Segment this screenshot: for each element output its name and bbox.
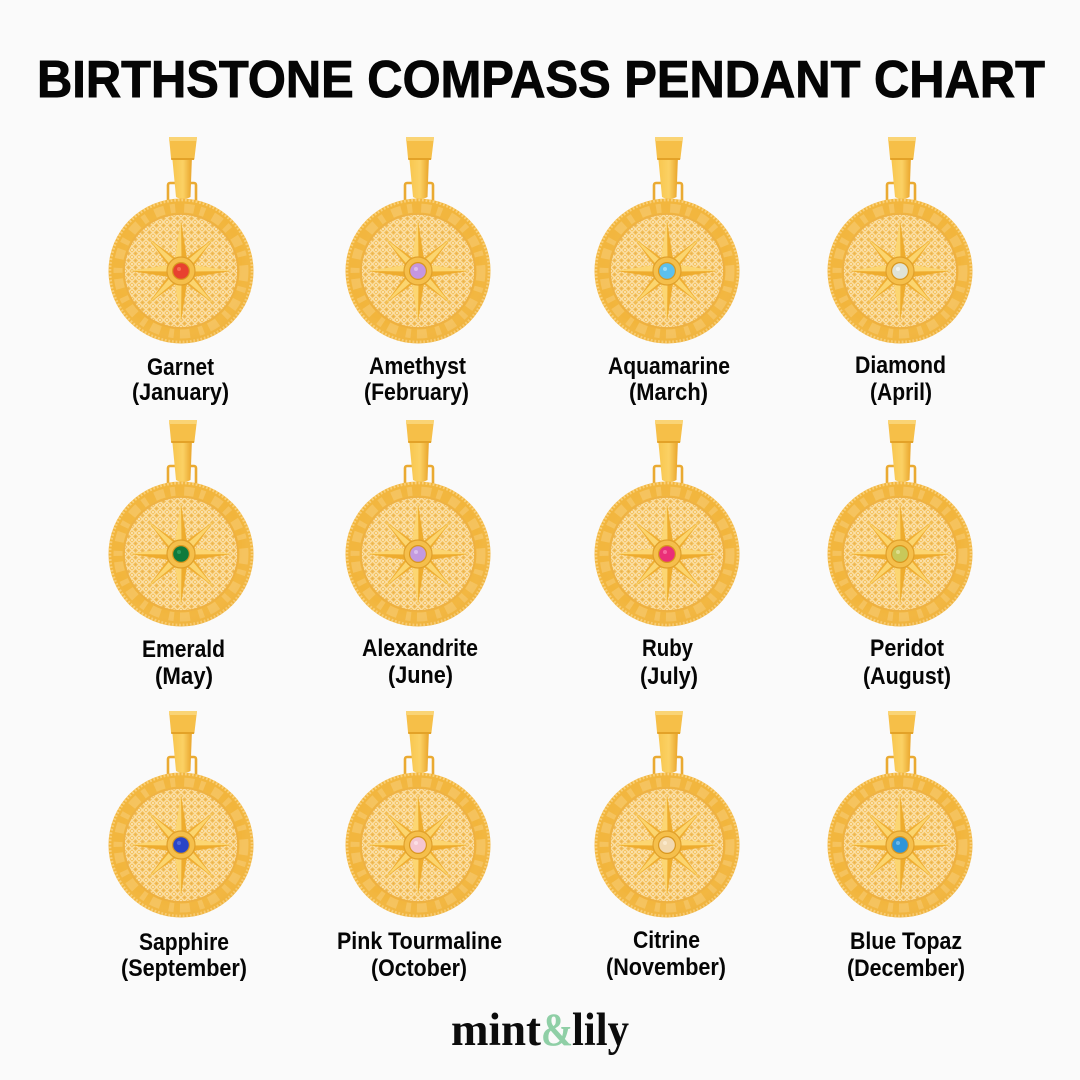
icon: Diamond pendant [828, 137, 972, 344]
label: Garnet (January): Garnet [147, 354, 214, 381]
label: Citrine (November) [606, 927, 726, 981]
label: Sapphire (September): Sapphire [139, 929, 229, 956]
label: Sapphire (September): (September) [121, 955, 247, 982]
label: Diamond (April): (April) [870, 379, 932, 406]
label: Alexandrite (June): Alexandrite [362, 635, 478, 662]
label: Aquamarine (March) [608, 353, 730, 406]
icon: Ruby pendant [594, 420, 740, 626]
label: Pink Tourmaline (October): Pink Tourmaline [337, 928, 502, 955]
icon: Garnet pendant [108, 137, 254, 344]
label: Blue Topaz (December): (December) [847, 955, 965, 982]
label: Pink Tourmaline (October) [337, 928, 502, 982]
icon: Alexandrite pendant [346, 420, 490, 626]
label: Emerald (May): Emerald [142, 636, 225, 663]
panel: Amethyst (February) [346, 137, 490, 406]
panel: Diamond (April) [828, 137, 972, 406]
label: Ruby (July): Ruby [642, 635, 694, 662]
title: BIRTHSTONE COMPASS PENDANT CHART [37, 51, 1045, 109]
panel: Alexandrite (June) [346, 420, 490, 689]
panel: Peridot (August) [828, 420, 972, 690]
label: Amethyst (February) [364, 353, 469, 406]
label: Garnet (January): (January) [132, 379, 229, 406]
label: Ruby (July): (July) [640, 663, 698, 690]
icon: Aquamarine pendant [594, 137, 740, 344]
icon: Emerald pendant [108, 420, 254, 626]
panel: Citrine (November) [594, 711, 740, 981]
icon: Amethyst pendant [346, 137, 490, 344]
panel: Ruby (July) [594, 420, 740, 690]
panel: Sapphire (September) [108, 711, 254, 982]
label: Sapphire (September) [121, 929, 247, 982]
logo: mint&lily [451, 1004, 629, 1056]
logo: mint&lily: lily [572, 1004, 629, 1056]
label: Emerald (May) [142, 636, 225, 690]
label: Diamond (April): Diamond [855, 352, 946, 379]
panel: Pink Tourmaline (October) [337, 711, 502, 982]
label: Aquamarine (March): (March) [629, 379, 708, 406]
panel: Blue Topaz (December) [828, 711, 972, 982]
label: Diamond (April) [855, 352, 946, 406]
icon: Citrine pendant [594, 711, 740, 918]
panel: Aquamarine (March) [594, 137, 740, 406]
label: Pink Tourmaline (October): (October) [371, 955, 467, 982]
label: Emerald (May): (May) [155, 663, 213, 690]
label: Alexandrite (June) [362, 635, 478, 689]
logo: mint&lily: mint [451, 1004, 541, 1056]
label: Amethyst (February): (February) [364, 379, 469, 406]
label: Peridot (August) [863, 635, 951, 690]
label: Garnet (January) [132, 354, 229, 406]
logo: mint&lily: & [541, 1004, 573, 1056]
label: Ruby (July) [640, 635, 698, 690]
icon: Peridot pendant [828, 420, 972, 626]
label: Peridot (August): (August) [863, 663, 951, 690]
icon: Blue Topaz pendant [828, 711, 972, 918]
panel: Emerald (May) [108, 420, 254, 690]
icon: Pink Tourmaline pendant [346, 711, 490, 918]
icon: Sapphire pendant [108, 711, 254, 918]
label: Blue Topaz (December): Blue Topaz [850, 928, 962, 955]
label: Alexandrite (June): (June) [388, 662, 453, 689]
label: Blue Topaz (December) [847, 928, 965, 982]
label: Citrine (November): (November) [606, 954, 726, 981]
label: Aquamarine (March): Aquamarine [608, 353, 730, 380]
label: Peridot (August): Peridot [870, 635, 944, 662]
label: Amethyst (February): Amethyst [369, 353, 466, 380]
panel: Garnet (January) [108, 137, 254, 406]
label: Citrine (November): Citrine [633, 927, 700, 954]
